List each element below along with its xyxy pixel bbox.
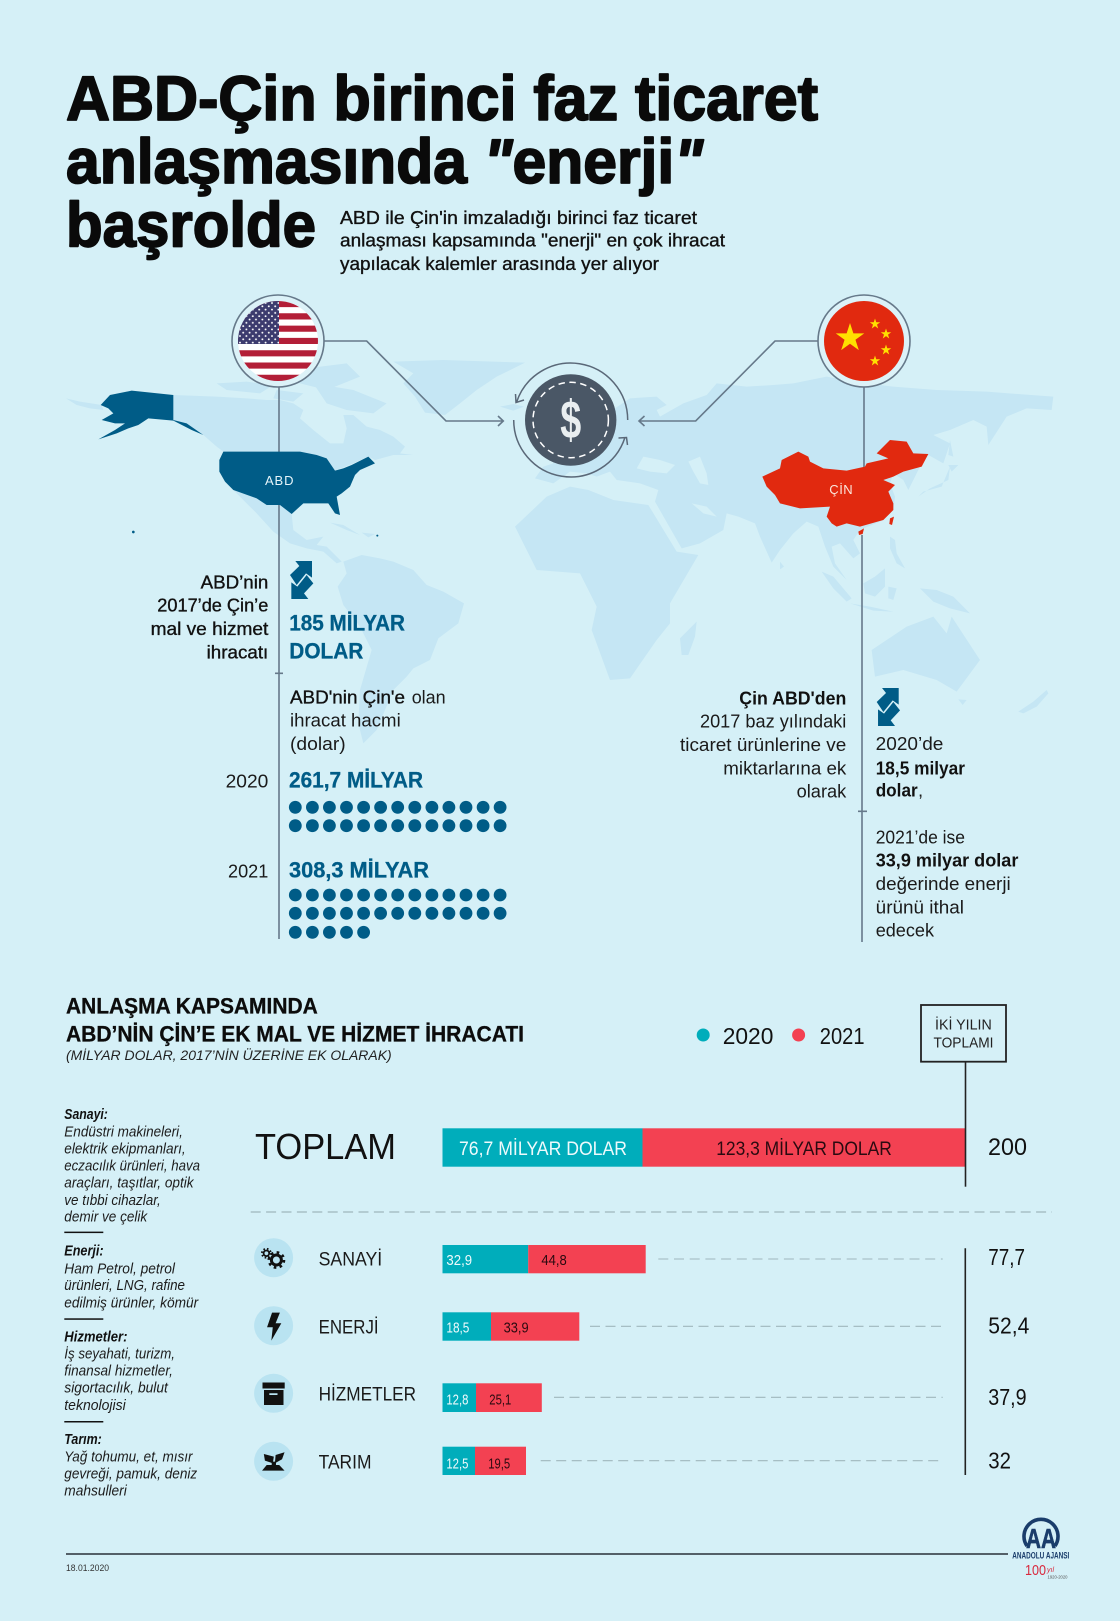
- icon: exchange arrows USA: [290, 561, 313, 599]
- icon: USA flag: [232, 295, 324, 387]
- stat: 2021 volume with dots: 308,3 MİLYAR: [289, 857, 429, 882]
- definition: Hizmetler: finansal hizmetler,: [64, 1364, 173, 1380]
- figure: 185 billion dollars: 185 MİLYAR: [289, 611, 405, 636]
- world map: [66, 360, 1053, 743]
- stat: 2020 volume with dots: [226, 768, 506, 832]
- subtitle: anlaşması kapsamında "enerji" en çok ihracat: [340, 230, 725, 251]
- text: China energy imports: 18,5 milyar: [876, 757, 965, 778]
- icon: gears: [262, 1249, 284, 1268]
- sector row: Sanayi: 32,9: [446, 1253, 472, 1269]
- text: China energy imports: [876, 733, 1018, 941]
- text: China import label: ticaret ürünlerine ve: [680, 734, 846, 755]
- sector row: Tarım: [254, 1442, 1011, 1481]
- title: anlaşmasında "enerji": [66, 127, 704, 197]
- definition: Hizmetler: Hizmetler:: [64, 1329, 128, 1345]
- subtitle: yapılacak kalemler arasında yer alıyor: [340, 253, 659, 274]
- text: USA 2017 export label: [151, 571, 268, 662]
- definition: Sanayi: demir ve çelik: [64, 1210, 148, 1226]
- total row: 123,3 MİLYAR DOLAR: [716, 1139, 892, 1160]
- sector row: Hizmetler: [254, 1374, 1027, 1413]
- text: USA 2017 export label: 2017’de Çin’e: [157, 595, 268, 616]
- text: China import label: miktarlarına ek: [723, 757, 847, 778]
- definition: Tarım: Yağ tohumu, et, mısır: [64, 1449, 194, 1465]
- section heading: ABD’NİN ÇİN’E EK MAL VE HİZMET İHRACATI: [66, 1022, 524, 1047]
- stat: 2020 volume with dots: 261,7 MİLYAR: [289, 768, 423, 793]
- title: ABD-Çin birinci faz ticaret: [66, 64, 818, 134]
- sector row: Tarım: 12,5: [446, 1456, 468, 1472]
- text: USA 2017 export label: mal ve hizmet: [151, 618, 268, 639]
- text: China energy imports: 33,9 milyar dolar: [876, 850, 1018, 871]
- sector row: Hizmetler: 25,1: [489, 1392, 511, 1408]
- text: China import label: 2017 baz yılındaki: [700, 711, 846, 732]
- label: ÇİN: ÇİN: [829, 482, 853, 497]
- subtitle: [340, 207, 725, 274]
- total row: 200: [988, 1134, 1027, 1161]
- logo: Anadolu Ajansi: ANADOLU AJANSI: [1012, 1550, 1069, 1560]
- text: export volume: ihracat hacmi: [290, 710, 401, 731]
- text: China energy imports: dolar: [876, 780, 918, 801]
- definition: Hizmetler: [64, 1329, 175, 1414]
- definition: Sanayi: Endüstri makineleri,: [64, 1125, 183, 1141]
- sector row: Tarım: 19,5: [488, 1456, 510, 1472]
- definition: Sanayi: Sanayi:: [64, 1107, 108, 1123]
- logo: Anadolu Ajansi: 100: [1025, 1562, 1046, 1579]
- subtitle: ABD ile Çin'in imzaladığı birinci faz ticaret: [340, 207, 697, 228]
- text: China import label: olarak: [797, 781, 847, 802]
- sector row: Hizmetler: HİZMETLER: [319, 1385, 416, 1406]
- stat: 2021 volume with dots: [228, 857, 506, 939]
- definition: Enerji: [64, 1244, 199, 1311]
- definition: Tarım: mahsulleri: [64, 1483, 128, 1499]
- legend: [697, 1023, 864, 1049]
- stat: 2021 volume with dots: 2021: [228, 860, 268, 881]
- icon: dollar coin with circular arrows: $: [560, 390, 581, 450]
- date: 18.01.2020: [66, 1563, 109, 1574]
- total row: [255, 1062, 1027, 1187]
- stat: 2020 volume with dots: 2020: [226, 771, 268, 792]
- text: China import label: [680, 687, 847, 802]
- map highlight: China: [762, 440, 928, 535]
- text: export volume: [290, 686, 446, 754]
- sector row: Sanayi: 77,7: [988, 1244, 1025, 1270]
- side text: sector definitions: [64, 1107, 200, 1499]
- logo: Anadolu Ajansi: yıl: [1046, 1567, 1054, 1574]
- sector row: Tarım: 32: [988, 1447, 1011, 1473]
- definition: Hizmetler: sigortacılık, bulut: [64, 1381, 169, 1397]
- label: ABD: ABD: [265, 473, 294, 488]
- text: export volume: olan: [412, 686, 446, 707]
- logo: Anadolu Ajansi: 1920-2020: [1048, 1574, 1068, 1579]
- sector row: Sanayi: SANAYİ: [319, 1250, 382, 1271]
- icon: seedling: [262, 1452, 285, 1471]
- definition: Tarım: gevreği, pamuk, deniz: [64, 1466, 198, 1482]
- definition: Sanayi: ve tıbbi cihazlar,: [64, 1193, 161, 1209]
- definition: Tarım: Tarım:: [64, 1432, 102, 1448]
- total row: TOPLAM: [255, 1126, 396, 1167]
- text: China energy imports: 2021’de ise: [876, 826, 965, 847]
- icon: China flag: [818, 295, 910, 387]
- legend: 2021: [820, 1023, 864, 1049]
- sector row: Enerji: [254, 1306, 1029, 1345]
- logo: Anadolu Ajansi: [1012, 1519, 1069, 1579]
- sector row: Tarım: TARIM: [319, 1452, 372, 1473]
- text: export volume: (dolar): [290, 733, 346, 754]
- section heading: [66, 993, 524, 1063]
- text: USA 2017 export label: ABD’nin: [201, 571, 268, 592]
- definition: Enerji: Enerji:: [64, 1244, 104, 1260]
- icon: exchange arrows China: [877, 688, 900, 726]
- icon: archive box: [262, 1382, 285, 1405]
- definition: Hizmetler: teknolojisi: [64, 1398, 126, 1414]
- definition: Sanayi: eczacılık ürünleri, hava: [64, 1159, 200, 1175]
- logo: Anadolu Ajansi: AA: [1026, 1523, 1056, 1554]
- box: two-year total header: TOPLAMI: [934, 1036, 994, 1052]
- sector row: Sanayi: [254, 1238, 1025, 1277]
- title: başrolde: [66, 191, 316, 261]
- definition: Sanayi: [64, 1107, 200, 1226]
- footer rule: [66, 1553, 1008, 1555]
- definition: Enerji: Ham Petrol, petrol: [64, 1261, 176, 1277]
- sector row: Hizmetler: 37,9: [988, 1384, 1027, 1410]
- text: China import label: Çin ABD'den: [739, 687, 846, 708]
- definition: Enerji: edilmiş ürünler, kömür: [64, 1295, 199, 1311]
- sector row: Hizmetler: 12,8: [446, 1392, 468, 1408]
- sector row: Enerji: 18,5: [446, 1320, 469, 1336]
- text: USA 2017 export label: ihracatı: [207, 641, 268, 662]
- text: China energy imports: ürünü ithal: [876, 896, 964, 917]
- box: two-year total header: [921, 1005, 1006, 1062]
- sector row: Enerji: ENERJİ: [319, 1317, 379, 1338]
- icon: lightning bolt: [267, 1313, 281, 1341]
- definition: Hizmetler: İş seyahati, turizm,: [64, 1346, 175, 1363]
- legend: 2020: [723, 1023, 773, 1049]
- definition: Sanayi: araçları, taşıtlar, optik: [64, 1176, 194, 1192]
- text: export volume: ABD'nin Çin'e: [290, 686, 405, 707]
- figure: 185 billion dollars: DOLAR: [289, 638, 363, 663]
- total row: 76,7 MİLYAR DOLAR: [459, 1139, 627, 1160]
- text: China energy imports: değerinde enerji: [876, 873, 1011, 894]
- text: China energy imports: 2020’de: [876, 733, 943, 754]
- section heading: (MİLYAR DOLAR, 2017’NİN ÜZERİNE EK OLARAK): [66, 1046, 392, 1063]
- connector lines: [275, 341, 867, 942]
- sector row: Enerji: 52,4: [988, 1312, 1029, 1338]
- sector row: Sanayi: 44,8: [541, 1253, 567, 1269]
- box: two-year total header: İKİ YILIN: [935, 1015, 992, 1033]
- section heading: ANLAŞMA KAPSAMINDA: [66, 993, 318, 1018]
- definition: Sanayi: elektrik ekipmanları,: [64, 1141, 186, 1157]
- definition: Tarım: [64, 1432, 198, 1499]
- figure: 185 billion dollars: [289, 611, 405, 663]
- sector row: Enerji: 33,9: [504, 1320, 529, 1336]
- title: [66, 64, 818, 261]
- text: China energy imports: edecek: [876, 920, 935, 941]
- definition: Enerji: ürünleri, LNG, rafine: [64, 1278, 185, 1294]
- text: China energy imports: ,: [918, 780, 923, 801]
- map highlight: USA: [98, 391, 378, 537]
- icon: dollar coin with circular arrows: [514, 363, 628, 477]
